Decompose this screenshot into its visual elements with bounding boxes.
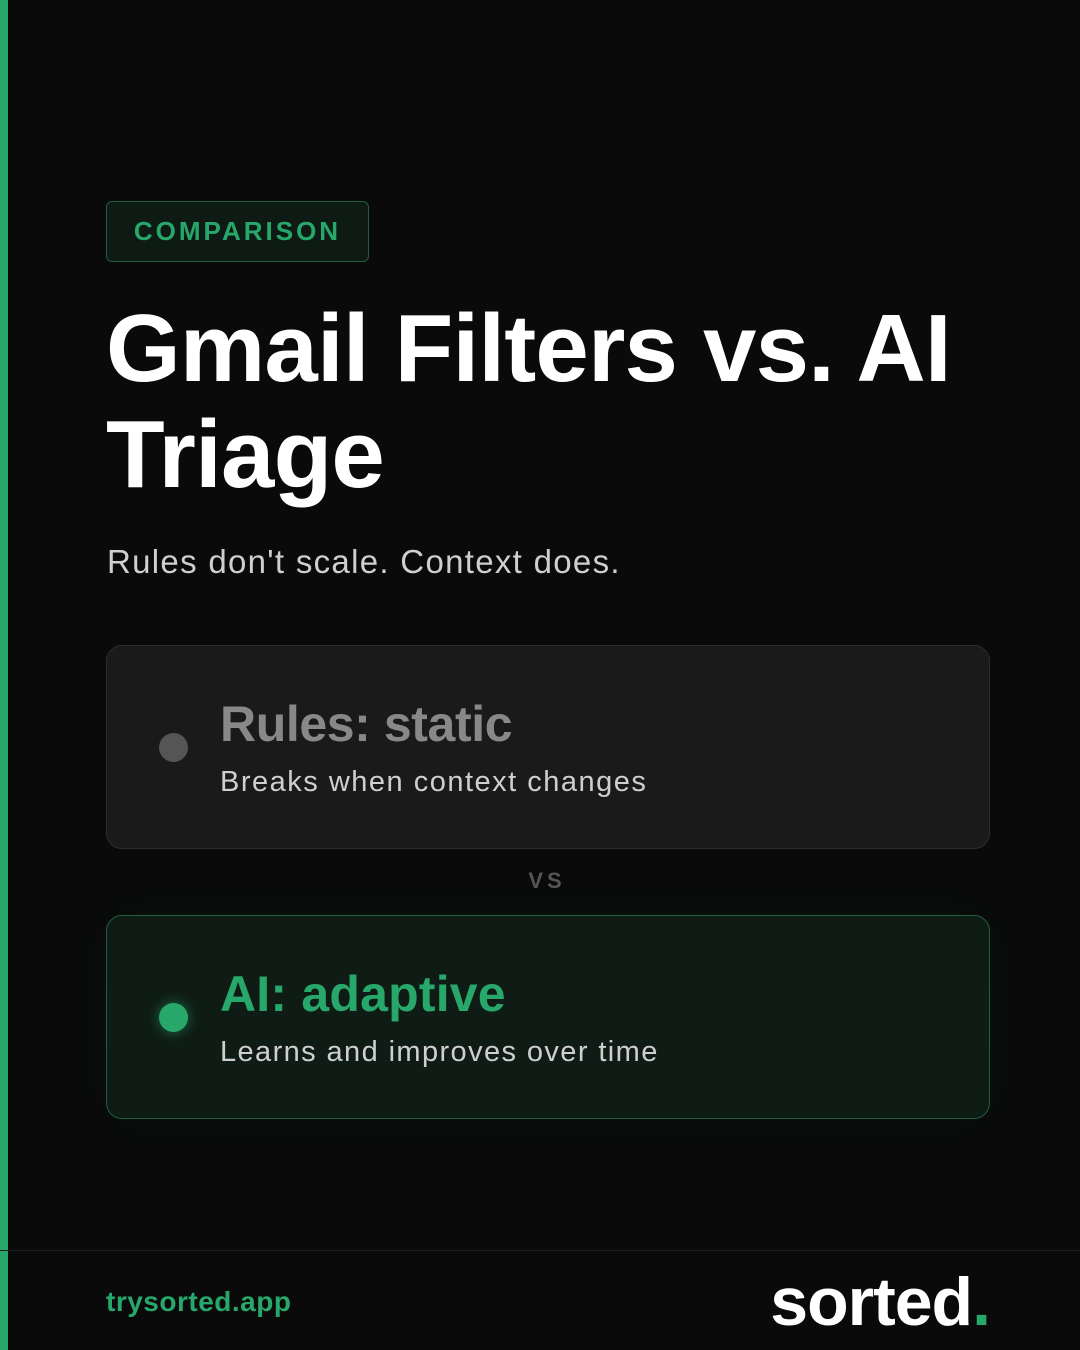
title: Triage (106, 401, 384, 508)
text: ai desc: Learns and improves over time (220, 1036, 659, 1068)
vs label: VS (528, 868, 566, 893)
logo: sorted. (770, 1264, 990, 1340)
subtitle: Rules don't scale. Context does. (107, 543, 621, 580)
text: rules desc: Breaks when context changes (220, 766, 647, 798)
tag: comparison: COMPARISON (134, 216, 341, 246)
heading: ai adaptive: AI: adaptive (220, 966, 506, 1022)
heading: rules static: Rules: static (220, 696, 512, 752)
icon: grey dot (159, 733, 188, 762)
title (106, 295, 951, 508)
tag: comparison (106, 201, 369, 262)
title: Gmail Filters vs. AI (106, 295, 951, 402)
panel: ai (106, 915, 990, 1119)
icon: green dot (159, 1003, 188, 1032)
panel: rules (106, 645, 990, 849)
footer url: trysorted.app (106, 1286, 291, 1317)
accent bar (0, 0, 8, 1350)
footer divider (0, 1250, 1080, 1251)
